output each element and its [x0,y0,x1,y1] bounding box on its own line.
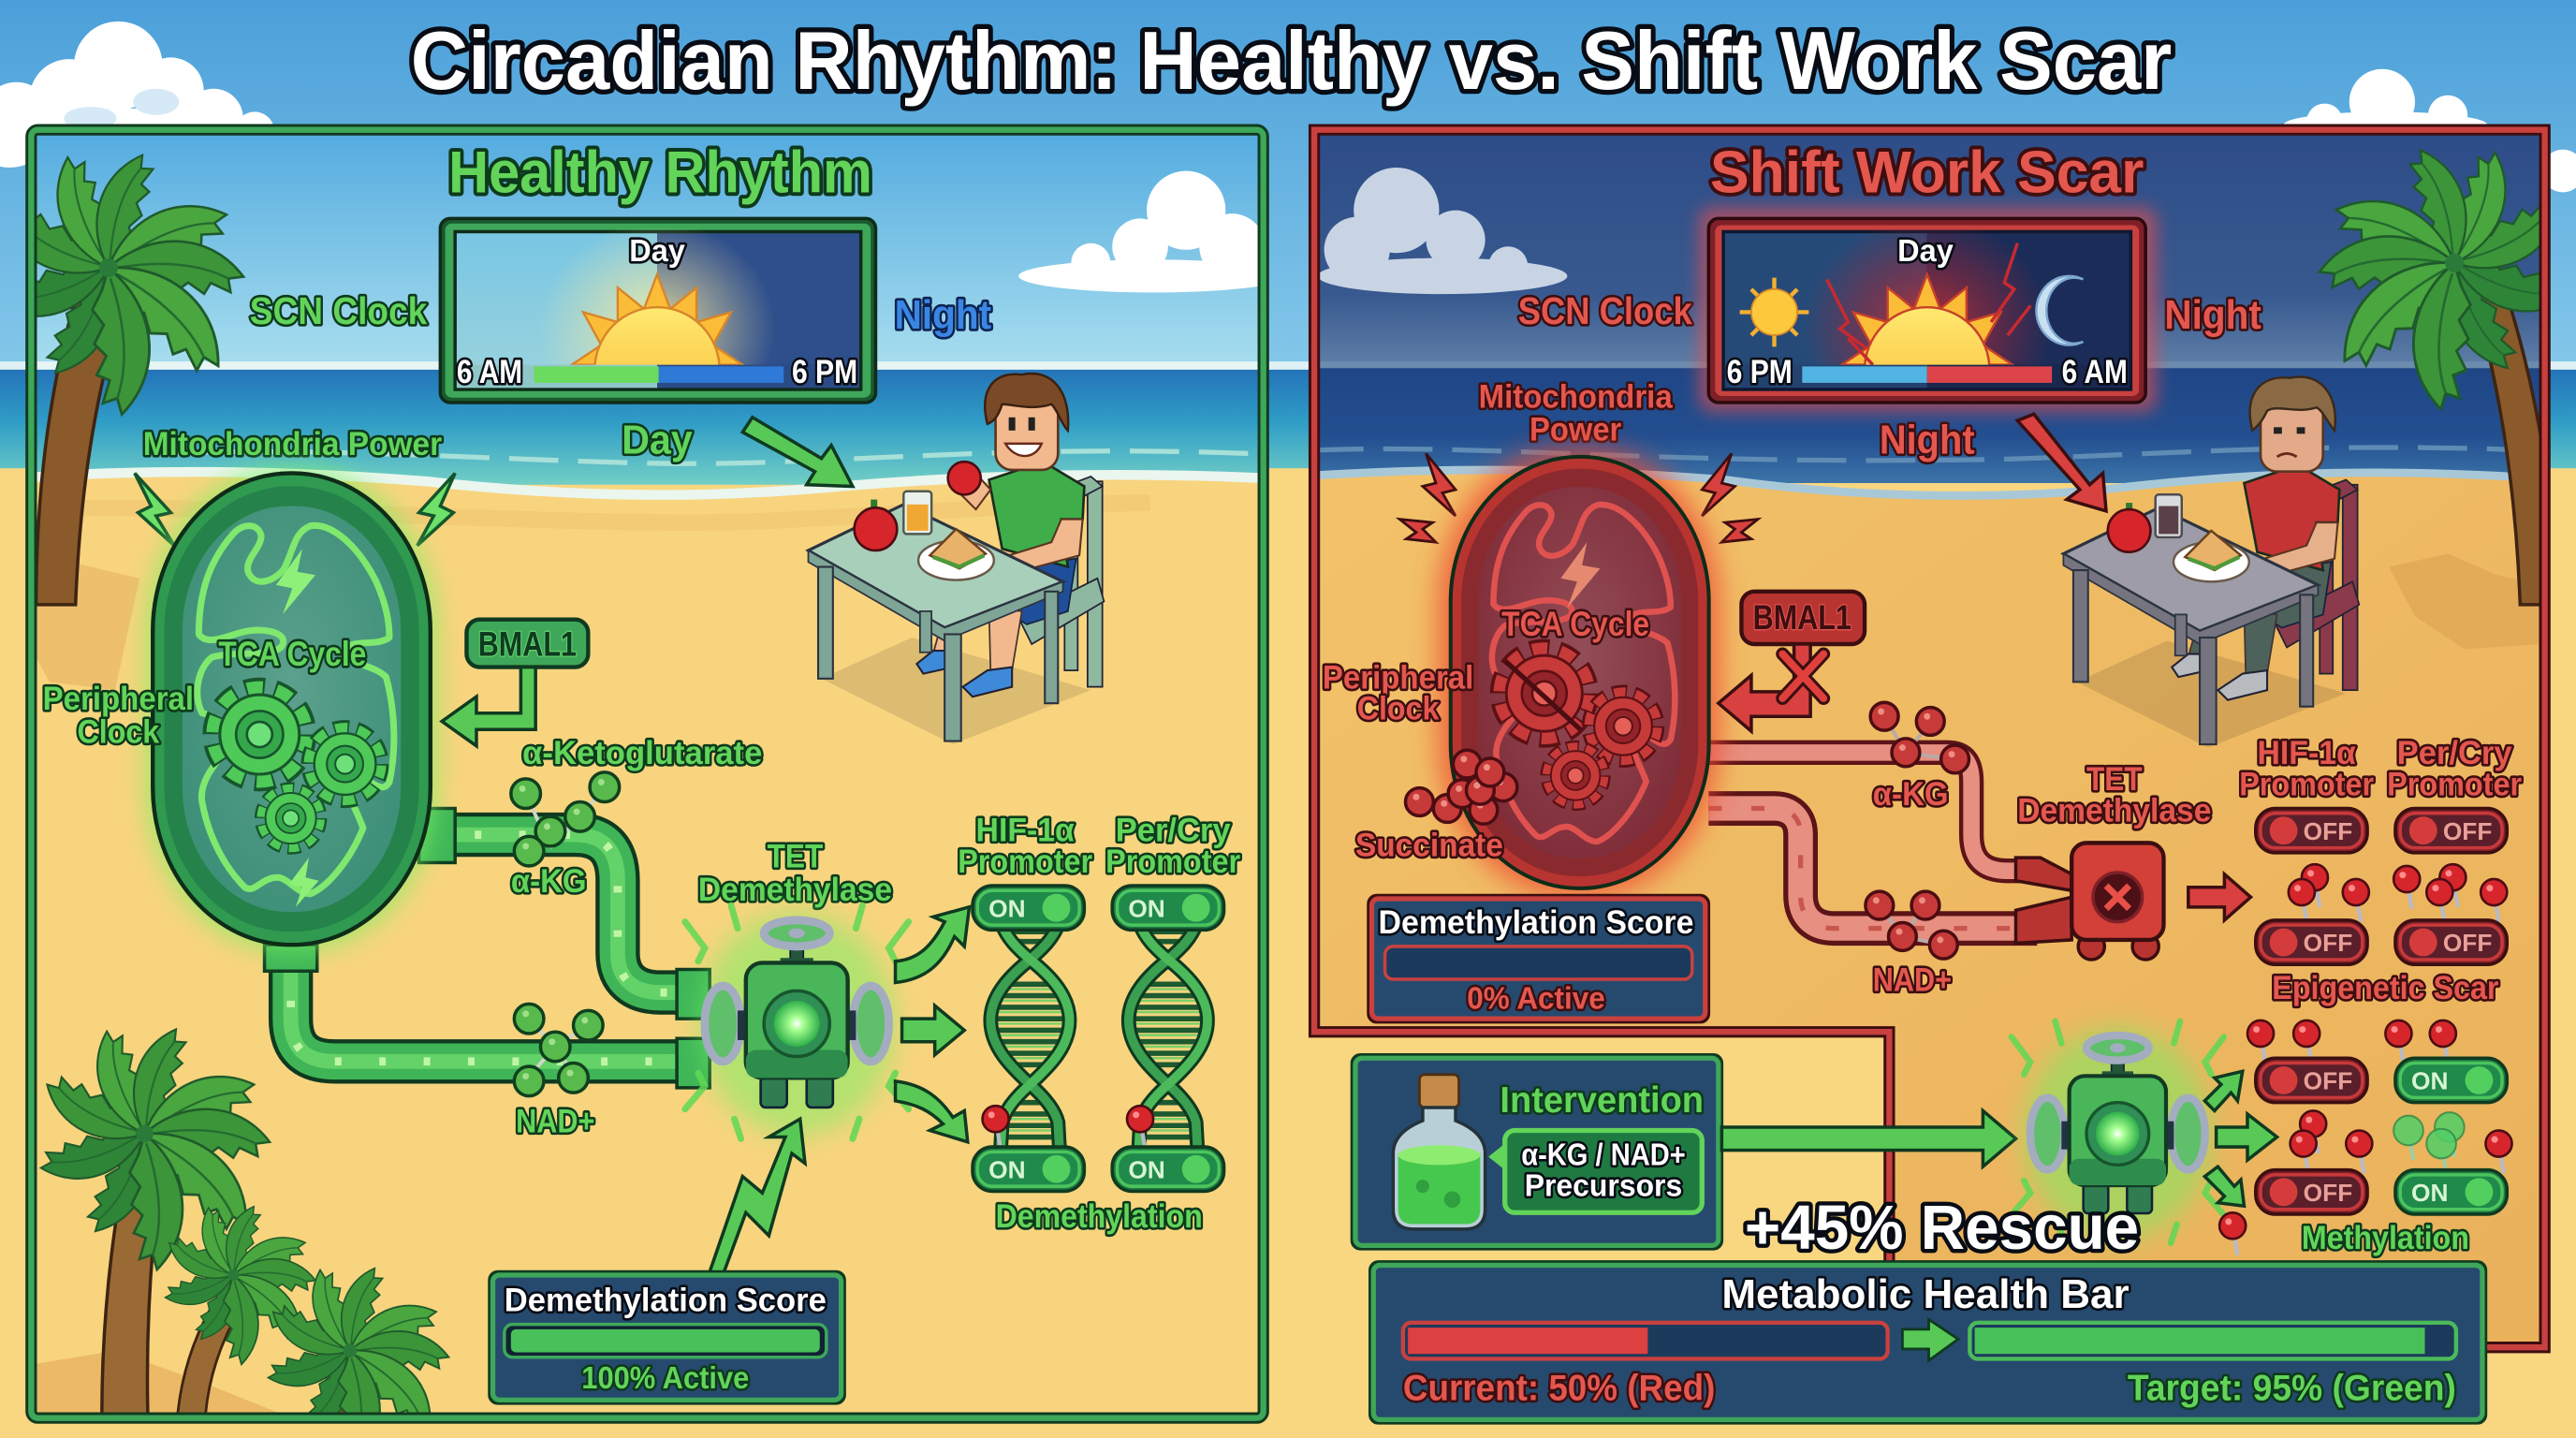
text: day: Day [629,234,685,269]
icon: methyl groups third row right [2385,1020,2456,1064]
label: mitochondria power [1479,378,1673,448]
icon: palm tree small lower left [267,1267,451,1412]
panel: intervention [1352,1055,1721,1249]
icon: sandwich [918,529,994,580]
toggle: third row off: OFF [2304,1067,2352,1095]
badge: BMAL1 [466,620,588,668]
label: HIF-1 alpha promoter: Promoter [958,844,1092,880]
label: SCN clock: SCN Clock [250,289,428,332]
cloud: panel sky [1018,170,1258,292]
toggle: HIF-1 bottom on [973,1147,1084,1191]
label: SCN clock: SCN Clock [1518,289,1692,332]
toggle: fourth row off: OFF [2304,1179,2352,1207]
icon: methyl group on Per/Cry DNA [1127,1106,1153,1149]
arrow: day to meal [742,418,853,487]
label: peripheral clock: Clock [1357,691,1440,727]
text: 6 AM: 6 AM [457,354,522,390]
pipe: damaged NAD pipe [1708,809,2037,929]
icon: potion bottle [1393,1075,1486,1229]
label: methylation: Methylation [2302,1220,2469,1256]
arrow: blocked BMAL1 signal [1719,644,1810,731]
clock bar [534,366,783,383]
toggle: second row right off [2395,920,2507,964]
cloud: top left [0,22,279,168]
icon: disabled TET enzyme [2016,843,2163,960]
icon: alpha-KG molecule [511,772,620,866]
icon: TET enzyme machine [685,905,909,1138]
panel: healthy rhythm [0,130,1298,1438]
icon: lightning right [417,473,455,546]
label: TET demethylase [698,839,892,908]
badge: BMAL1: BMAL1 [478,624,577,663]
panel: day night clock [438,217,878,404]
diagram: damaged mitochondrion [1405,447,1720,897]
label: TET demethylase: TET [768,839,824,875]
title: Circadian Rhythm: Healthy vs. Shift Work Scar [411,15,2172,107]
label: alpha ketoglutarate: α-Ketoglutarate [522,735,762,771]
arrow: intervention to rescue enzyme [1721,1110,2016,1167]
icon: apple on table [2108,503,2150,552]
arrow: BMAL1 to mitochondrion [442,668,535,746]
toggle: second row left off: OFF [2304,929,2352,957]
label: night: Night [895,292,992,338]
toggle: fourth row on [2395,1170,2507,1214]
icon: removed methyl group [2219,1212,2246,1255]
box: precursors [1488,1131,1702,1212]
toggle: Per/Cry bottom on [1112,1147,1224,1191]
face [985,374,1068,470]
icon: methyl groups fourth row left [2291,1110,2372,1173]
toggle: HIF-1 off: OFF [2304,817,2352,845]
badge: BMAL1 [1741,592,1865,644]
arrow: rescue output middle [2217,1114,2277,1160]
panel: shift work scar [1298,125,2569,1438]
icon: lightning left [135,473,174,546]
toggle: fourth row on: ON [2411,1179,2449,1207]
icon: alpha-KG molecule [1870,702,1969,773]
toggle: Per/Cry top on: ON [1128,894,1165,922]
icon: weak energy bolt [1560,542,1600,608]
text: TCA cycle: TCA Cycle [218,635,366,673]
toggle: Per/Cry top on [1112,886,1224,930]
label: succinate: Succinate [1355,827,1503,863]
label: HIF-1 alpha promoter: Promoter [2239,766,2374,802]
toggle: third row off [2256,1058,2367,1103]
icon: NAD molecule [514,1004,603,1096]
diagram: DNA helix HIF-1 [990,925,1070,1152]
toggle: second row right off: OFF [2443,929,2492,957]
icon: moon [2036,276,2083,345]
toggle: Per/Cry bottom on: ON [1128,1155,1165,1183]
icon: stress sparks [1399,453,1758,542]
pipe: alpha-KG pipe [431,835,710,992]
label: alpha-KG: α-KG [1873,776,1949,813]
cloud: top right [2284,69,2576,192]
panel: disrupted clock [1699,207,2157,440]
arrow: night to meal [2017,414,2106,511]
icon: TCA gears [216,691,378,846]
bar: current 50 [1403,1323,1888,1358]
label: HIF-1 alpha promoter: HIF-1α [976,813,1075,849]
clock bar [1802,366,2052,383]
box: precursors: α-KG / NAD+ [1521,1137,1686,1172]
icon: sun [549,228,769,367]
figure: healthy person eating [809,374,1104,744]
heading: healthy rhythm: Healthy Rhythm [448,139,872,205]
label: Per/Cry promoter: Promoter [1105,844,1240,880]
label: alpha-KG: α-KG [511,863,587,900]
label: TET demethylase: Demethylase [698,872,892,908]
icon: energy bolt [276,549,315,614]
label: peripheral clock [1323,659,1473,727]
arrow: to bottom of DNA [896,1081,968,1142]
label: HIF-1 alpha promoter [958,813,1092,880]
icon: apple on table [855,500,897,550]
pipe: damaged alpha-KG pipe [1708,753,2037,871]
label: NAD+: NAD+ [516,1103,594,1139]
icon: small sun [1740,278,1808,346]
icon: methyl groups second row right [2393,864,2507,922]
icon: dark drink glass [2156,494,2182,537]
badge: BMAL1: BMAL1 [1753,598,1852,637]
title: Metabolic Health Bar [1721,1271,2130,1317]
label: peripheral clock [43,681,194,750]
toggle: HIF-1 bottom on: ON [988,1155,1026,1183]
icon: NAD molecule [1866,891,1957,959]
icon: palm tree mid lower left [163,1202,318,1416]
panel: demethylation score 0 [1368,896,1708,1022]
toggle: fourth row off [2256,1170,2367,1214]
text: day: Day [1897,234,1954,269]
panel: demethylation score 100: Demethylation Score [505,1283,827,1319]
panel: metabolic health bar [1370,1262,2485,1423]
label: Per/Cry promoter: Promoter [2387,766,2522,802]
label: mitochondria power: Power [1530,411,1622,448]
panel: demethylation score 100 [490,1271,844,1403]
text: TCA cycle: TCA Cycle [1501,605,1649,643]
bar: target 95 [1969,1323,2456,1358]
icon: sandwich [2174,531,2249,581]
icon: palm tree right [2318,148,2539,607]
icon: energy bolt lower [289,858,318,907]
frame: shift work panel border [1314,130,2545,1347]
arrow: rescue output bottom [2204,1167,2244,1206]
box: precursors: Precursors [1525,1169,1682,1204]
panel: demethylation score 0: Demethylation Score [1379,904,1694,941]
label: TET demethylase [2017,761,2211,829]
progress bar full [505,1325,827,1357]
pipe: NAD pipe [265,809,710,1088]
callout: plus 45 percent rescue: +45% Rescue [1745,1194,2139,1263]
icon: juice glass [903,492,931,534]
arrow: current to target [1902,1319,1958,1360]
toggle: HIF-1 off [2256,809,2367,853]
label: Per/Cry promoter: Per/Cry [2397,735,2512,771]
icon: palm tree tall lower left [38,1022,274,1416]
icon: block cross [1782,654,1823,698]
label: HIF-1 alpha promoter: HIF-1α [2258,735,2356,771]
icon: methyl groups second row left [2289,864,2369,922]
icon: rescued TET enzyme [2012,1021,2224,1243]
cloud: dark panel sky [1318,168,1567,294]
arrow: to middle of DNA [902,1005,964,1055]
label: demethylation: Demethylation [996,1198,1203,1235]
panel: demethylation score 100: 100% Active [581,1361,749,1396]
text: 6 PM: 6 PM [1727,354,1793,390]
toggle: Per/Cry off: OFF [2443,817,2492,845]
text: 6 PM: 6 PM [792,354,857,390]
toggle: Per/Cry off [2395,809,2507,853]
label: day: Day [622,417,693,462]
progress bar empty [1385,946,1692,979]
arrow: score to enzyme [710,1119,805,1275]
toggle: third row on: ON [2411,1067,2449,1095]
label: HIF-1 alpha promoter [2239,735,2374,802]
arrow: to top of DNA [896,907,970,983]
text: target value: Target: 95% (Green) [2128,1368,2456,1408]
icon: methyl groups fourth row right [2393,1112,2512,1173]
diagram: healthy mitochondrion [148,468,435,949]
label: NAD+: NAD+ [1873,961,1952,998]
icon: big sun with stress cracks [1811,230,2043,367]
text: 6 AM: 6 AM [2062,354,2128,390]
icon: broken TCA gears [1503,652,1655,802]
label: epigenetic scar: Epigenetic Scar [2272,970,2499,1006]
panel: demethylation score 0: 0% Active [1467,982,1605,1017]
label: peripheral clock: Peripheral [1323,659,1473,696]
icon: succinate cluster [1405,750,1517,824]
toggle: HIF-1 top on: ON [988,894,1026,922]
toggle: HIF-1 top on [973,886,1084,930]
figure: tired person eating [2063,376,2359,748]
icon: methyl group on HIF-1 DNA [983,1106,1009,1149]
face [2250,376,2335,472]
label: mitochondria power: Mitochondria [1479,378,1673,415]
label: TET demethylase: Demethylase [2017,793,2211,829]
toggle: third row on [2395,1058,2507,1103]
icon: methyl groups third row left [2247,1020,2320,1064]
arrow: blocked output [2188,874,2250,920]
label: mitochondria power: Mitochondria Power [143,426,442,462]
label: TET demethylase: TET [2086,761,2143,798]
label: Per/Cry promoter [1105,813,1240,880]
heading: shift work scar: Shift Work Scar [1710,139,2144,205]
text: current value: Current: 50% (Red) [1403,1368,1715,1408]
frame: healthy panel border [31,130,1264,1418]
label: night meal: Night [1880,417,1975,462]
label: night outside: Night [2164,292,2261,338]
label: Per/Cry promoter: Per/Cry [1116,813,1231,849]
icon: apple in hand [948,462,990,509]
arrow: rescue output top [2204,1071,2243,1110]
label: peripheral clock: Clock [77,713,160,750]
diagram: DNA helix Per/Cry [1129,925,1208,1152]
toggle: second row left off [2256,920,2367,964]
icon: palm tree upper left [37,154,245,607]
label: Per/Cry promoter [2387,735,2522,802]
text: intervention: Intervention [1500,1080,1704,1121]
label: peripheral clock: Peripheral [43,681,194,717]
